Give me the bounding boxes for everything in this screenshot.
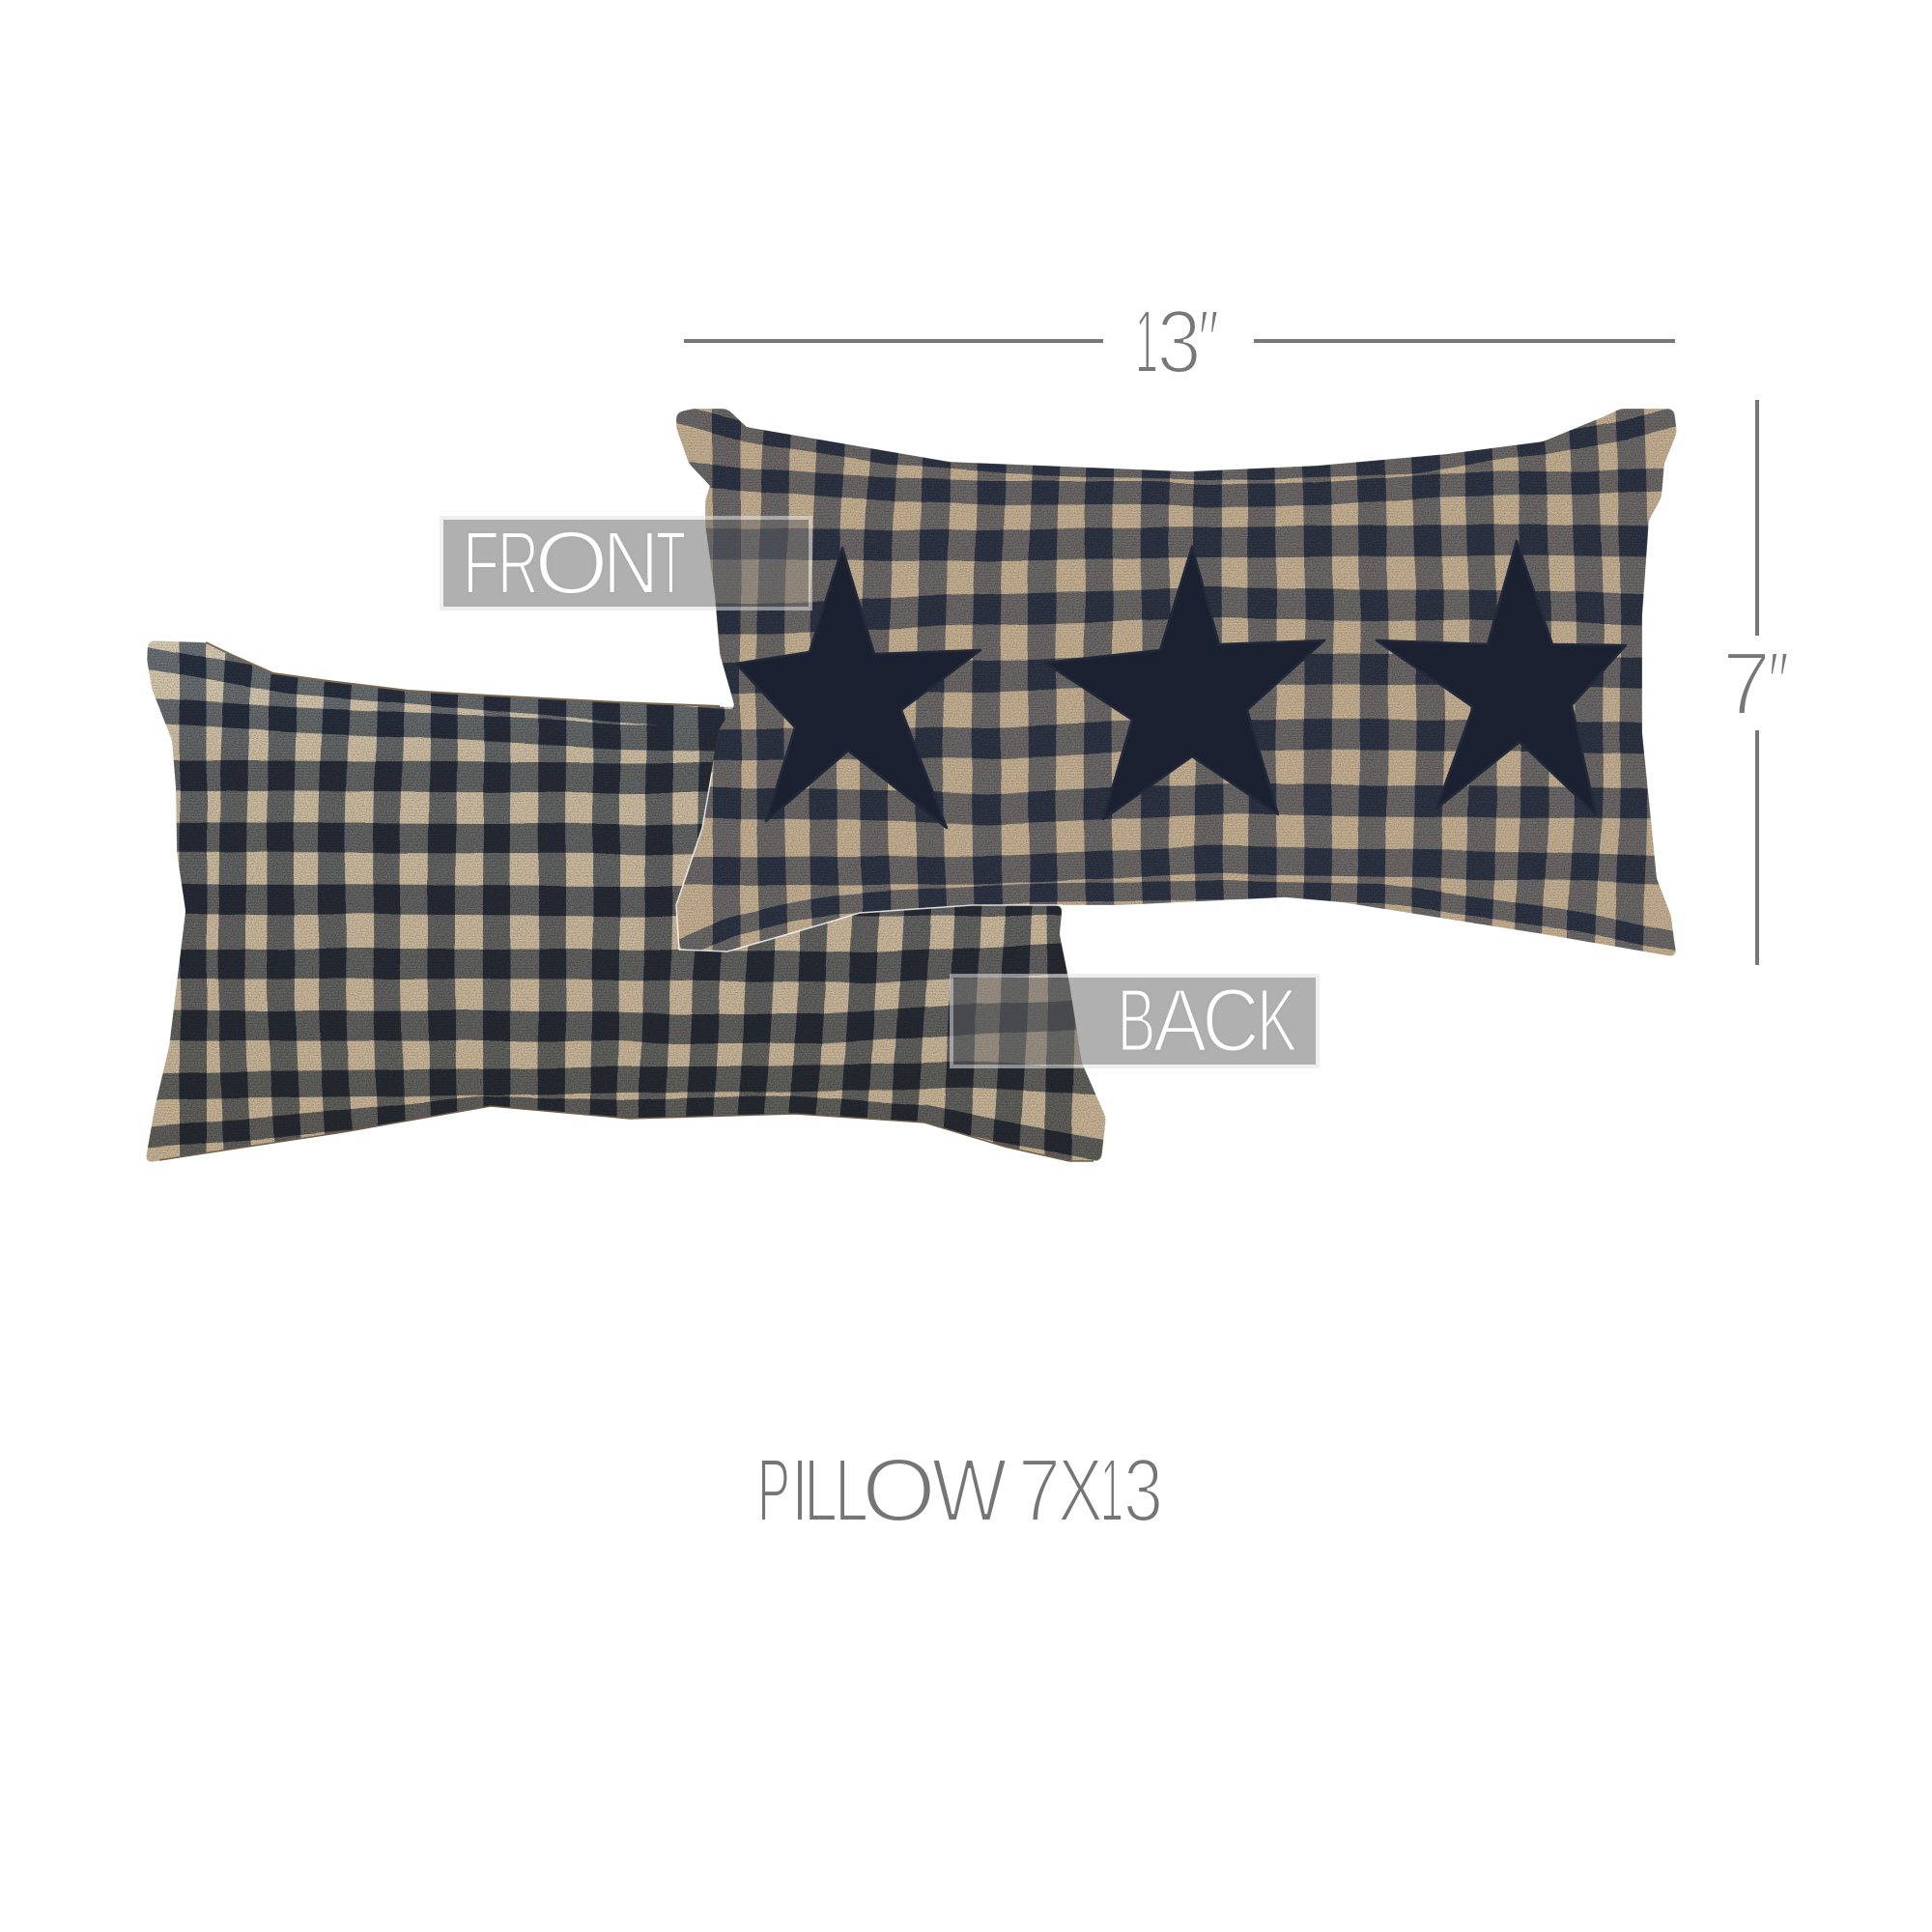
back pillow: [146, 640, 1106, 1162]
height dimension 7 inches: [1722, 400, 1789, 965]
front label: [441, 512, 810, 612]
caption: I: [791, 1439, 809, 1540]
back label: B: [1117, 970, 1155, 1070]
gingham fabric: [676, 409, 1677, 956]
back label: [952, 970, 1318, 1070]
front label: N: [603, 512, 659, 612]
caption: 1: [1100, 1439, 1123, 1540]
width dimension 13 inches: [684, 292, 1675, 392]
caption: X: [1058, 1439, 1103, 1540]
caption: L: [835, 1439, 868, 1540]
caption: W: [931, 1439, 1008, 1540]
caption: 3: [1123, 1439, 1163, 1540]
back label: C: [1202, 970, 1260, 1070]
height dimension 7 inches: ″: [1768, 634, 1789, 734]
front pillow: [675, 409, 1677, 956]
caption: O: [862, 1439, 936, 1540]
caption: 7: [1018, 1439, 1061, 1540]
caption: L: [804, 1439, 838, 1540]
pillow size infographic: [146, 311, 1787, 1520]
width dimension 13 inches: ″: [1198, 292, 1219, 392]
star 2: [1045, 547, 1324, 819]
caption: P: [757, 1439, 790, 1540]
back label: K: [1257, 970, 1297, 1070]
star 1: [736, 548, 980, 828]
height dimension 7 inches: 7: [1722, 634, 1771, 734]
star 3: [1377, 541, 1626, 814]
front label: R: [497, 512, 539, 612]
width dimension 13 inches: 3: [1157, 292, 1202, 392]
front label: O: [534, 512, 609, 612]
front label: T: [656, 512, 686, 612]
back label: A: [1153, 970, 1208, 1070]
width dimension 13 inches: 1: [1135, 292, 1158, 392]
front label: F: [463, 512, 499, 612]
